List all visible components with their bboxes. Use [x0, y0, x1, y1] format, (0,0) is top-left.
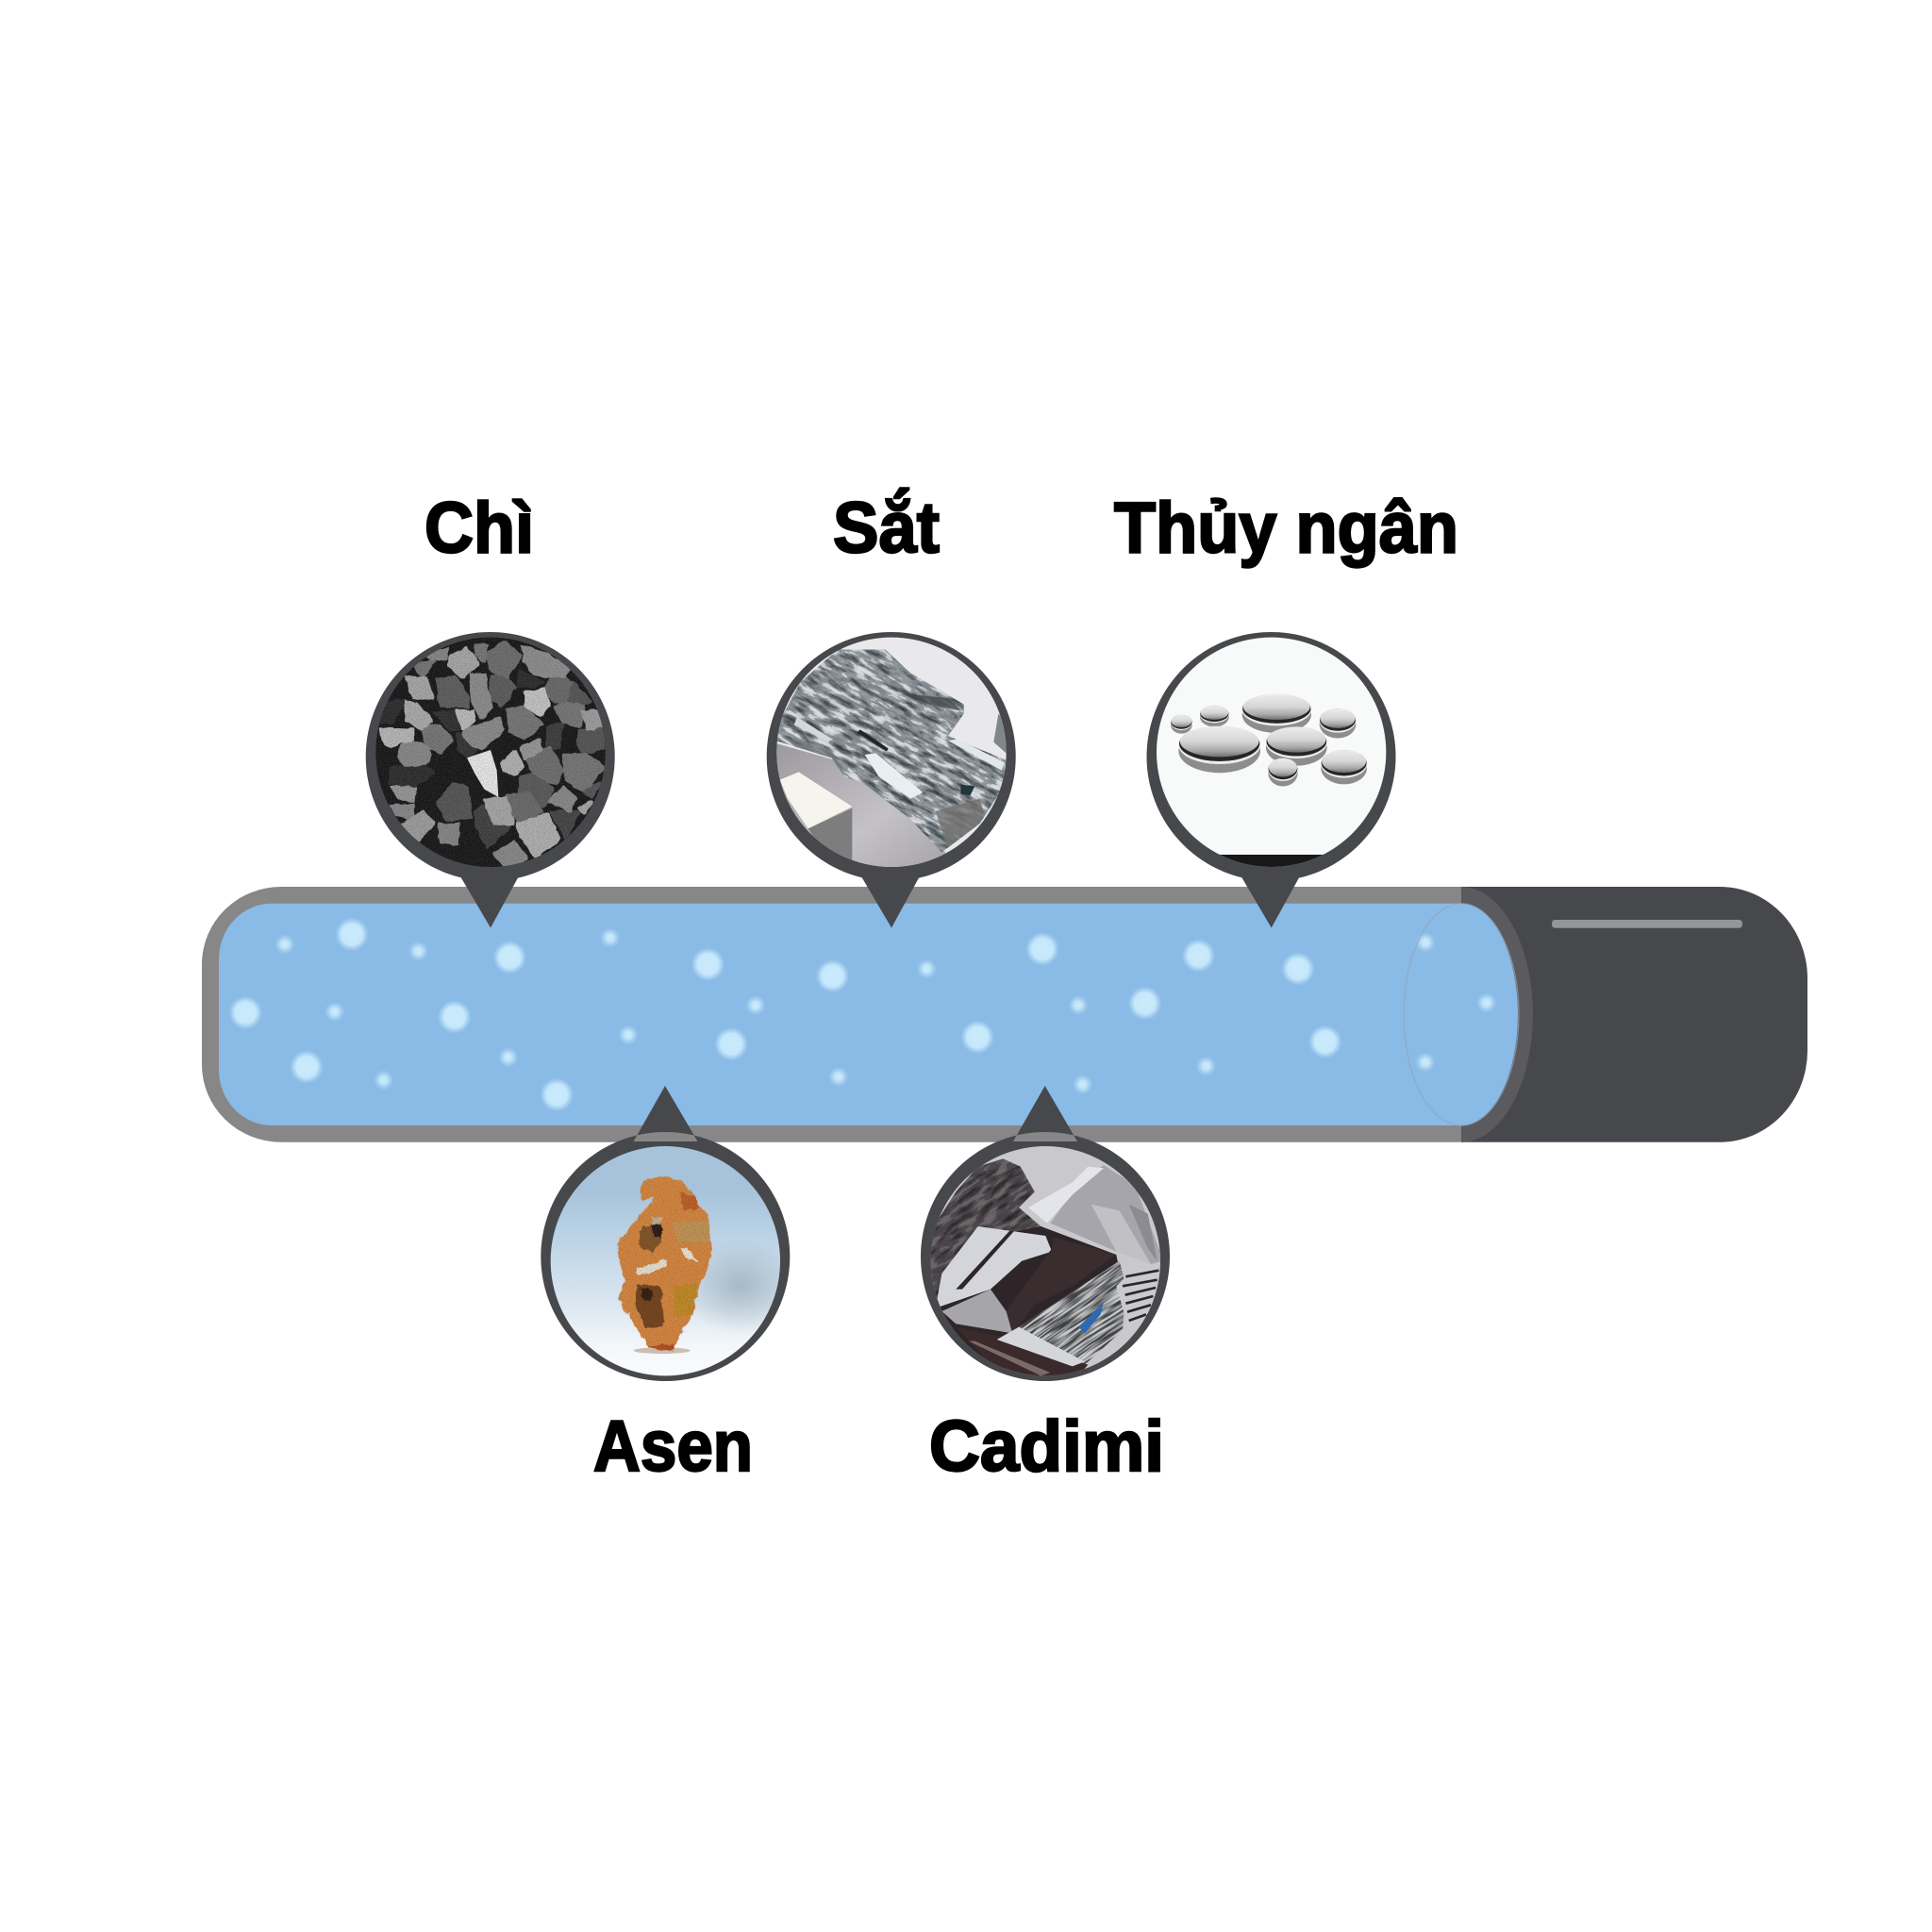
label: Asen: Asen — [593, 1407, 753, 1487]
pin marker — [1147, 632, 1396, 928]
pin: Asen (arsenic) — [541, 1086, 804, 1384]
photo: cadmium metal — [930, 1146, 1160, 1375]
photo: arsenic ore — [551, 1146, 780, 1375]
label: Cadimi: Cadimi — [929, 1407, 1164, 1487]
pin marker — [541, 1086, 790, 1381]
photo: lead pellets — [371, 632, 610, 871]
small particles — [275, 927, 1497, 1095]
pin: Chì (lead) — [366, 632, 615, 928]
water — [219, 904, 1518, 1125]
water particles — [228, 917, 1497, 1111]
highlight bar — [1552, 920, 1742, 928]
label: Thủy ngân: Thủy ngân — [1114, 489, 1458, 568]
pipe inner edge ellipse — [1404, 904, 1519, 1125]
pin marker — [366, 632, 615, 928]
photo: iron crystal — [776, 638, 1007, 867]
pin: Sắt (iron) — [766, 632, 1016, 928]
pin: Thủy ngân (mercury) — [1147, 632, 1396, 928]
pipe dark outer body — [1461, 887, 1807, 1142]
large particles — [228, 917, 1342, 1111]
dark band at photo bottom — [1220, 855, 1323, 867]
photo: mercury droplets — [1151, 632, 1393, 874]
pin: Cadimi (cadmium) — [921, 1086, 1170, 1381]
pin marker — [767, 632, 1016, 928]
label: Sắt: Sắt — [833, 489, 940, 568]
pipe rim — [1461, 887, 1533, 1142]
pipe — [202, 887, 1807, 1142]
pipe grey wall — [202, 887, 1461, 1142]
pin marker — [921, 1086, 1170, 1381]
label: Chì: Chì — [425, 489, 534, 568]
